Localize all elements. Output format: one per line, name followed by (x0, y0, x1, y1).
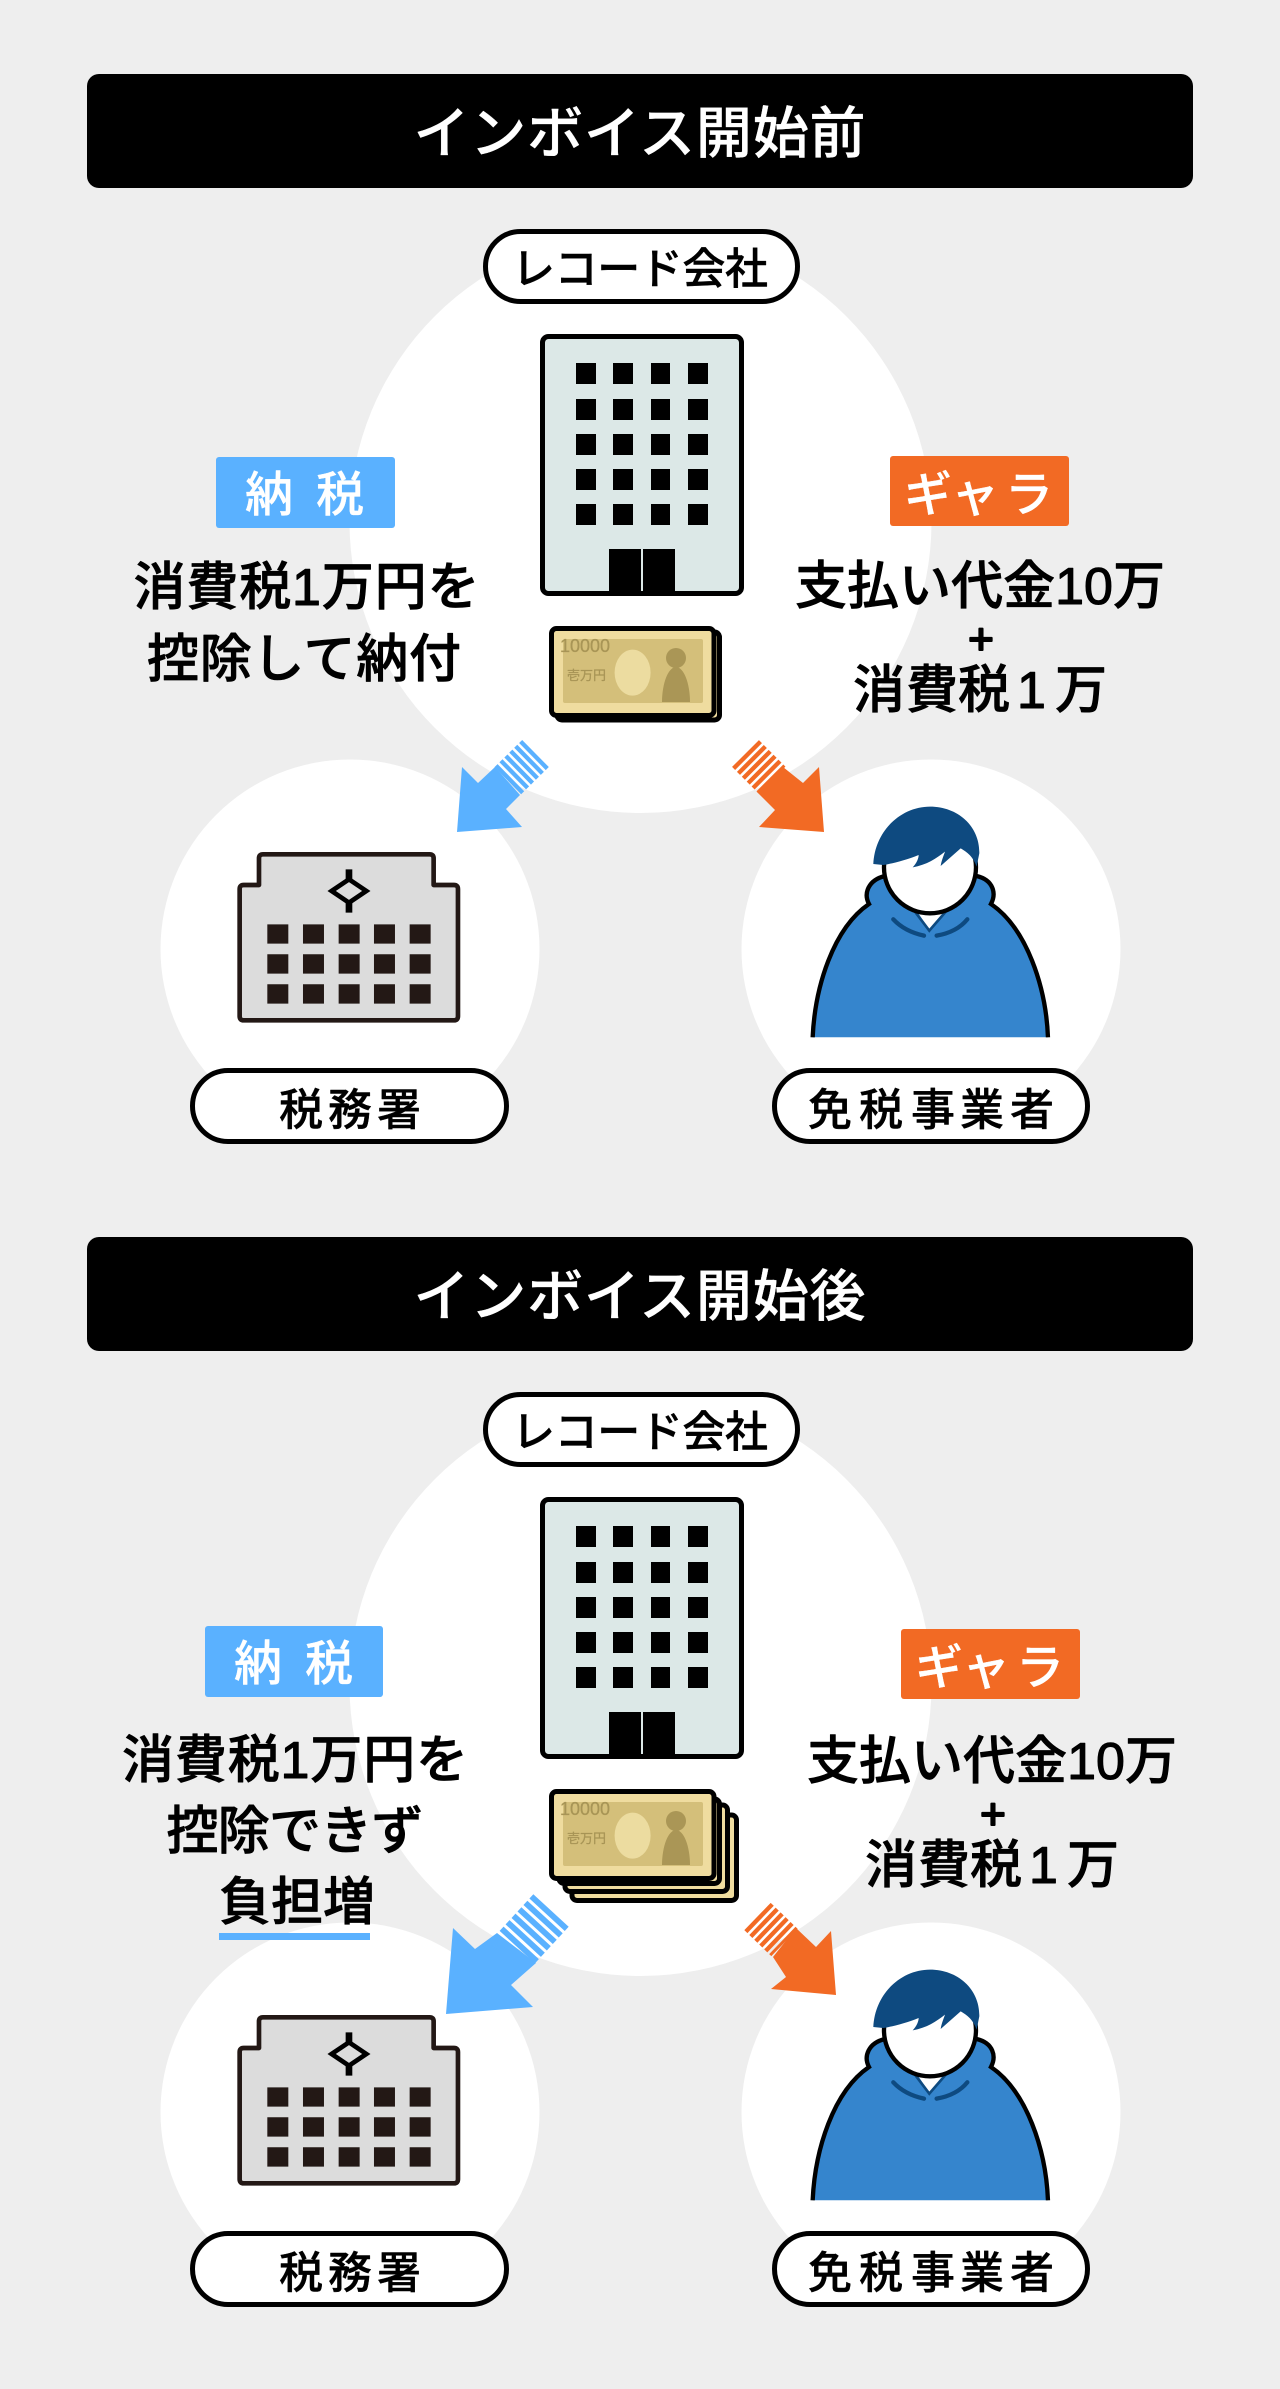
text: tax explanation with emphasis: 消費税1万円を (122, 1732, 468, 1790)
text: fee explanation (807, 1733, 1177, 1895)
title bar (87, 1237, 1193, 1351)
text: tax explanation (134, 559, 480, 689)
circle: freelancer backdrop (742, 1922, 1120, 2302)
section: after invoice (87, 1237, 1193, 2304)
text: fee explanation: + (968, 615, 994, 664)
pill: tax office: 税務署 (279, 2249, 421, 2298)
label: fee (890, 456, 1069, 526)
icon: banknotes (large stack) (552, 1792, 736, 1900)
pill: record company (486, 232, 798, 302)
title bar: インボイス開始前 (414, 102, 866, 165)
text: tax explanation: 消費税1万円を (134, 559, 480, 617)
pill: tax-exempt business (774, 1070, 1088, 1142)
pill: tax office: 税務署 (279, 1086, 421, 1135)
arrow: tax payment (larger blue) (446, 1910, 551, 2014)
circle: tax office backdrop (160, 760, 540, 1138)
arrow: tax payment (blue) (457, 754, 536, 832)
icon: banknotes (one stack) (552, 628, 720, 720)
text: fee explanation: 消費税1万 (865, 1837, 1119, 1895)
circle: tax office backdrop (160, 1922, 540, 2302)
icon: banknotes (large stack): 壱万円 (567, 1831, 606, 1846)
pill: record company: レコード会社 (512, 246, 768, 294)
icon: banknotes (large stack): 10000 (560, 1799, 610, 1819)
text: tax explanation: 控除して納付 (147, 631, 461, 689)
text: tax explanation with emphasis: 控除できず (166, 1803, 424, 1861)
label: tax: 納税 (234, 1638, 353, 1691)
circle: record company backdrop (350, 1394, 932, 1976)
pill: tax office (192, 2234, 506, 2304)
pill: tax-exempt business: 免税事業者 (808, 2249, 1054, 2298)
text: fee explanation: 支払い代金10万 (795, 558, 1165, 616)
icon: freelancer person (813, 807, 1048, 1037)
label: fee (901, 1629, 1080, 1699)
label: fee: ギャラ (904, 469, 1053, 522)
icon: tax office (240, 854, 458, 1020)
text: fee explanation: 支払い代金10万 (807, 1733, 1177, 1791)
pill: tax-exempt business: 免税事業者 (808, 1086, 1054, 1135)
label: fee: ギャラ (915, 1642, 1064, 1695)
pill: record company: レコード会社 (512, 1409, 768, 1457)
icon: banknotes (one stack): 10000 (560, 636, 610, 656)
text: fee explanation: 消費税1万 (853, 662, 1107, 720)
icon: office building (542, 1500, 742, 1757)
text: tax explanation with emphasis: 負担増 (219, 1874, 375, 1932)
pill: tax-exempt business (774, 2234, 1088, 2304)
arrow: fee payment (orange) (758, 1916, 836, 1995)
section: before invoice (87, 74, 1193, 1142)
label: tax (205, 1626, 383, 1697)
title bar: インボイス開始後 (414, 1265, 866, 1328)
arrow: fee payment (orange) (746, 754, 824, 832)
icon: tax office (240, 2017, 458, 2183)
text: tax explanation with emphasis (122, 1732, 468, 1940)
title bar (87, 74, 1193, 188)
circle: freelancer backdrop (742, 760, 1120, 1138)
text: fee explanation (795, 558, 1165, 720)
circle: record company backdrop (350, 231, 932, 813)
icon: banknotes (one stack): 壱万円 (567, 668, 606, 683)
text: fee explanation: + (980, 1790, 1006, 1839)
icon: freelancer person (813, 1970, 1048, 2200)
pill: tax office (192, 1070, 506, 1142)
pill: record company (486, 1394, 798, 1464)
label: tax (216, 457, 395, 528)
label: tax: 納税 (245, 469, 364, 522)
icon: office building (542, 336, 742, 594)
